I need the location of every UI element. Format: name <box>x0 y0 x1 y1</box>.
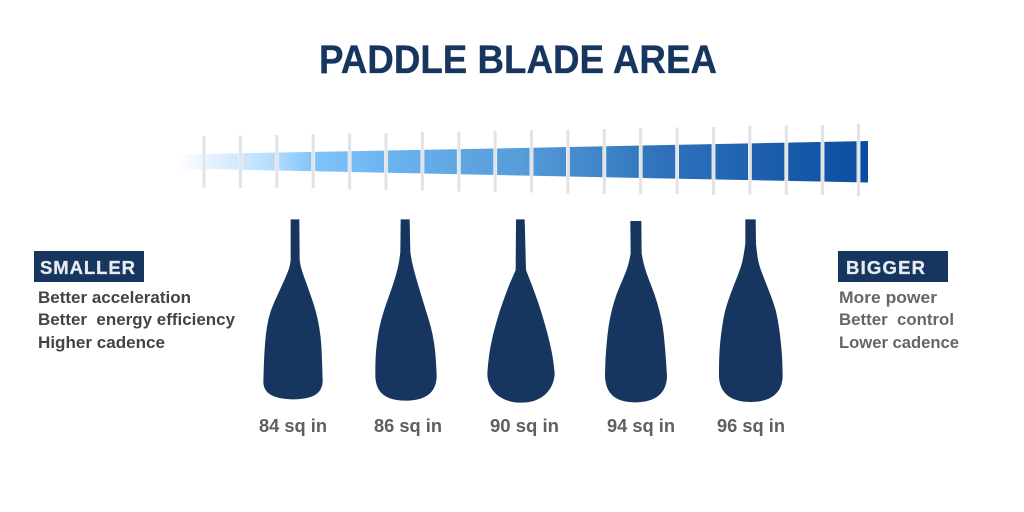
scale bar: growing blade area gradient with ticks <box>176 124 868 196</box>
bigger benefits list: Better control <box>839 310 954 329</box>
panel: smaller <box>34 251 236 352</box>
icon: paddle 86 sq in <box>375 219 437 401</box>
icon: paddle 84 sq in <box>263 219 323 399</box>
bigger badge <box>838 251 948 282</box>
bigger benefits list: Lower cadence <box>839 333 959 352</box>
paddle size labels: 84 sq in <box>259 416 327 436</box>
paddle size labels: 90 sq in <box>490 416 559 436</box>
smaller badge <box>34 251 144 282</box>
icon: paddle 96 sq in <box>719 219 783 402</box>
icon: paddle 94 sq in <box>605 221 667 402</box>
bigger heading: BIGGER <box>846 257 925 278</box>
tapered gradient bar <box>176 141 868 182</box>
smaller benefits list: Better acceleration <box>38 288 191 307</box>
paddle size labels: 86 sq in <box>374 416 442 436</box>
smaller benefits list: Higher cadence <box>38 333 165 352</box>
smaller benefits list: Better energy efficiency <box>38 310 236 329</box>
title: PADDLE BLADE AREA <box>319 38 717 82</box>
bigger benefits list <box>839 288 959 352</box>
paddle size labels <box>259 416 785 436</box>
smaller benefits list <box>38 288 236 352</box>
icon: paddle 90 sq in <box>487 219 555 403</box>
smaller heading: SMALLER <box>40 257 135 278</box>
paddle size labels: 96 sq in <box>717 416 785 436</box>
panel: bigger <box>838 251 959 352</box>
tick marks <box>202 124 860 196</box>
bigger benefits list: More power <box>839 288 937 307</box>
paddle size labels: 94 sq in <box>607 416 675 436</box>
